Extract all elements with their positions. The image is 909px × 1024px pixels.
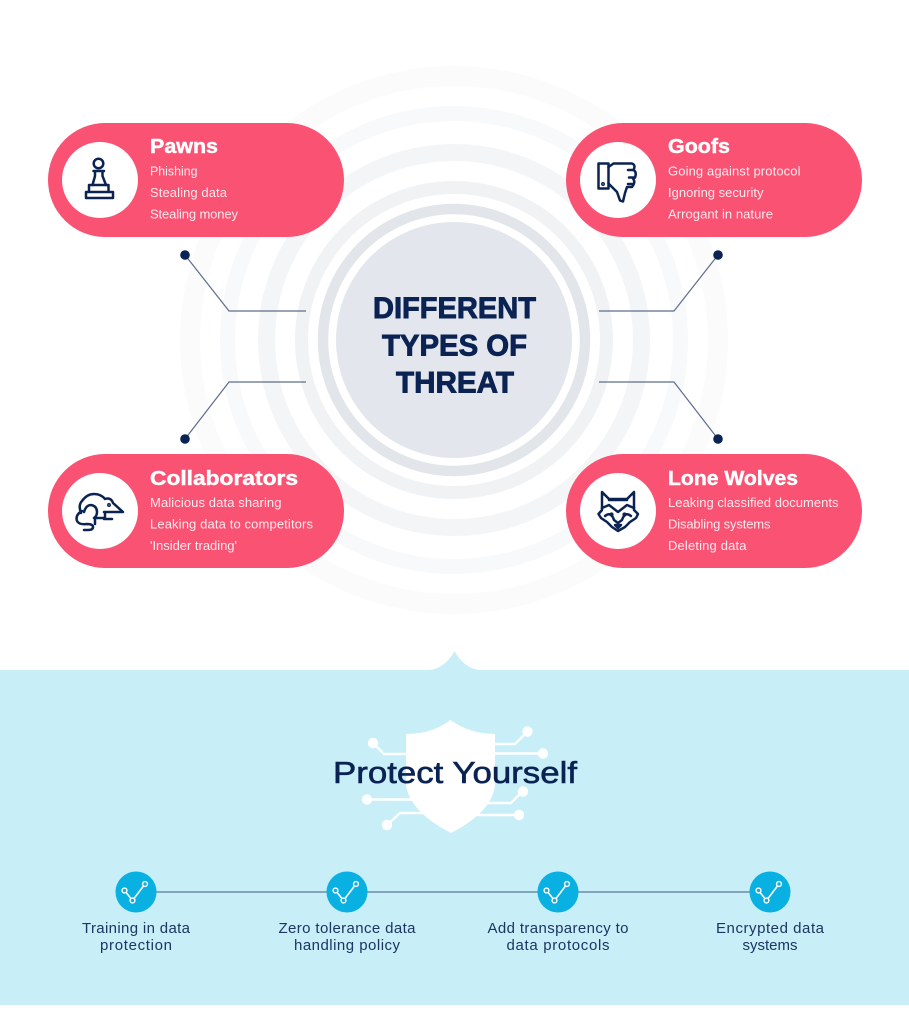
step 2 — [278, 872, 416, 954]
step 4: Encrypted data — [716, 920, 825, 937]
connector: collaborators — [180, 382, 306, 444]
icon: rat — [77, 494, 123, 530]
step 4: systems — [742, 937, 798, 954]
text: lone wolf threats: Disabling systems — [668, 516, 771, 532]
central circle with title — [336, 222, 572, 458]
step 1: Training in data — [82, 920, 191, 937]
icon: shield with circuit lines — [362, 720, 548, 833]
text: collaborator threats — [150, 495, 314, 553]
panel: lone wolves — [566, 454, 862, 568]
icon: wolf head — [598, 492, 638, 531]
central circle with title: DIFFERENT — [373, 292, 536, 325]
icon: chess pawn — [86, 159, 113, 198]
text: goof threats: Ignoring security — [668, 185, 764, 200]
central circle with title: THREAT — [396, 366, 514, 400]
step 1 — [82, 872, 191, 954]
step 2: handling policy — [294, 937, 400, 954]
panel: goofs — [566, 123, 862, 237]
text: pawn threats: Stealing data — [150, 185, 228, 200]
icon: thumbs down — [598, 164, 636, 202]
heading: Protect Yourself: Protect Yourself — [333, 755, 577, 790]
step 1: protection — [100, 937, 172, 954]
step 4 — [716, 872, 825, 954]
text: lone wolf threats: Leaking classified documents — [668, 495, 839, 510]
text: goof threats: Going against protocol — [668, 164, 801, 178]
text: collaborator threats: Malicious data sharing — [150, 495, 282, 510]
heading: Lone Wolves: Lone Wolves — [668, 468, 798, 490]
text: pawn threats — [150, 164, 238, 222]
step 3 — [488, 872, 628, 954]
text: lone wolf threats — [668, 495, 839, 553]
step 3: data protocols — [506, 937, 610, 954]
connector: pawns — [180, 250, 306, 311]
connector: lone wolves — [599, 382, 723, 444]
text: lone wolf threats: Deleting data — [668, 538, 747, 553]
text: goof threats — [668, 164, 801, 222]
central circle with title: TYPES OF — [382, 330, 527, 362]
heading: Collaborators: Collaborators — [150, 468, 298, 490]
connector: goofs — [599, 250, 723, 311]
text: pawn threats: Stealing money — [150, 206, 238, 222]
panel: protect yourself — [0, 651, 909, 1005]
heading: Pawns: Pawns — [150, 136, 218, 158]
text: pawn threats: Phishing — [150, 164, 198, 178]
text: collaborator threats: Leaking data to competitors — [150, 516, 314, 532]
concentric rings background — [190, 76, 718, 604]
text: goof threats: Arrogant in nature — [668, 206, 773, 222]
heading: Goofs: Goofs — [668, 136, 730, 158]
step 2: Zero tolerance data — [278, 920, 416, 937]
panel: pawns — [48, 123, 344, 237]
timeline connector — [136, 891, 770, 893]
text: collaborator threats: 'Insider trading' — [150, 538, 237, 553]
panel: collaborators — [48, 454, 344, 568]
step 3: Add transparency to — [488, 920, 628, 937]
